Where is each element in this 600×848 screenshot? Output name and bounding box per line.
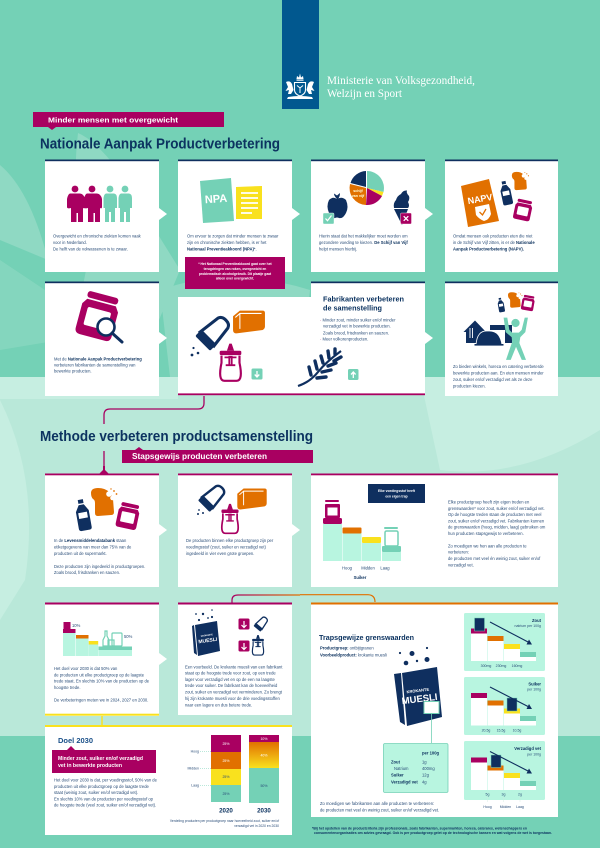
icon: document	[236, 186, 262, 219]
chart: stacked bars: 10%	[260, 737, 268, 741]
footnote	[312, 826, 552, 835]
callout	[52, 746, 156, 773]
icon: up arrow	[348, 369, 358, 380]
icon: NAPV book: NAPV	[467, 192, 493, 206]
list: · Meer volkorenproducten.	[320, 336, 368, 342]
icon: muesli box: KROKANTE	[406, 687, 430, 694]
chart: verzadigd vet: 3g	[502, 792, 505, 796]
chart: verzadigd vet: 5g	[486, 792, 489, 796]
chart: stacked bars: Laag	[191, 784, 199, 788]
chart: stacked bars: 25%	[222, 792, 230, 796]
card: voedingsstoffen	[178, 474, 300, 587]
icon: ice cream	[394, 190, 412, 225]
list: · Minder zout, minder suiker en/of minder	[320, 318, 396, 322]
footnote: *Bij het opstellen van de productcriteria zijn professionals, zoals fabrikanten, supermarkten, horeca, caterares, wetenschappers en	[312, 826, 527, 830]
chart: suiker: 10,5g	[513, 728, 521, 732]
card: schijf van vijf	[311, 160, 433, 272]
list	[320, 318, 396, 342]
ministry ribbon	[282, 0, 319, 109]
chart: mini steps	[63, 622, 133, 656]
text	[54, 356, 142, 374]
nutrition table	[384, 744, 448, 792]
text: voedingsstof (zout, suiker en verzadigd vet)	[186, 544, 266, 550]
chart: stacked bars: 25%	[222, 775, 230, 779]
text: Elke productgroep heeft zijn eigen treden en	[448, 500, 530, 504]
heading: de samenstelling	[323, 304, 382, 312]
text	[448, 500, 546, 567]
product info: Voorbeeldproduct: krokante muesli	[320, 652, 387, 658]
note: preventieakkoord: * Het Nationaal Preventieakkoord gaat over het	[198, 262, 273, 266]
caption: Verdeling producten per productgroep naar hoeveelheid zout, suiker en/of	[170, 819, 279, 823]
icon: muesli box	[192, 609, 220, 656]
card: fabrikanten	[178, 282, 433, 395]
icon: bread	[512, 172, 529, 190]
icon: wheat	[298, 349, 341, 386]
text: Omdat mensen ook producten eten die niet	[453, 234, 533, 238]
text	[187, 234, 279, 251]
chart: sugar steps: Midden	[361, 566, 375, 570]
nutrition table: Zout	[391, 760, 401, 764]
text: bewerkte producten aan. En eten mensen minder	[453, 370, 544, 376]
text	[319, 234, 408, 251]
chart: verzadigd vet: 2g	[518, 792, 522, 796]
chart: stacked bars: Midden	[188, 766, 199, 770]
chart: mini steps: 50%	[124, 634, 133, 639]
icon: pie: schijf	[353, 189, 363, 193]
text: Nationaal Preventieakkoord (NPA)*.	[187, 246, 257, 251]
text: Zo moedigen we hen aan alle producten te	[448, 544, 527, 548]
text	[453, 364, 544, 388]
icon: muesli box: MUESLI	[401, 692, 438, 707]
nutrition table: 4g	[422, 780, 427, 784]
text	[54, 538, 145, 575]
banner: stapsgewijs	[122, 447, 313, 463]
chart: zout	[464, 613, 545, 671]
chart: stacked bars: 25%	[222, 759, 230, 763]
chart: suiker: 20,5g	[482, 728, 490, 732]
heading: Trapsgewijze grenswaarden	[319, 633, 414, 642]
nutrition table: 12g	[422, 772, 430, 778]
text: hun producten stapsgewijs te verbeteren.	[448, 531, 524, 536]
text: verbeteren fabrikanten de samenstelling van	[54, 362, 136, 368]
icon: sugar reduce	[238, 635, 264, 655]
icon: syrup	[220, 344, 241, 381]
text: producten kiezen.	[453, 383, 486, 388]
icon: muesli box: KROKANTE	[201, 633, 214, 638]
text: hij zijn krokante muesli voor de drie voedingsstoffen	[185, 696, 280, 701]
text: Het doel voor 2030 is dat 50% van	[54, 666, 118, 671]
text: De helft van de volwassenen is te zwaar.	[53, 246, 128, 251]
text: Op de hoogste treden staan de producten met veel	[448, 512, 542, 517]
text: verbeteren:	[448, 550, 469, 555]
text: staat (weinig zout, suiker en/of verzadigd vet).	[54, 790, 138, 795]
card: muesli voorbeeld	[178, 602, 292, 715]
chart: stacked bars: 40%	[260, 754, 268, 758]
chart: zout: Zout	[532, 618, 542, 623]
text: in de Schijf van Vijf zitten, is er de Nationale	[453, 240, 535, 245]
card: doel 2030	[45, 725, 292, 835]
text: trede voor suiker. De fabrikant kan de hoeveelheid	[185, 683, 278, 688]
nutrition table: per 100g	[422, 750, 440, 756]
text: grenswaarden* voor zout, suiker en/of verzadigd vet.	[448, 506, 545, 511]
text: zout, suiker en/of verzadigd vet als ze deze	[453, 377, 533, 382]
nutrition table: 400mg	[422, 766, 435, 771]
text: naar een lagere en dus betere trede.	[185, 702, 252, 708]
callout: Minder zout, suiker en/of verzadigd	[58, 756, 143, 762]
icon: apple	[323, 193, 348, 224]
chart: zout: 300mg	[481, 664, 491, 668]
text: Aanpak Productverbetering (NAPV).	[453, 246, 524, 251]
title: methode: Methode verbeteren productsamenstelling	[40, 429, 313, 445]
icon: pie: van vijf	[352, 194, 365, 198]
chart: stacked bars	[188, 735, 279, 814]
nutrition table: Suiker	[391, 772, 404, 778]
chart: sugar steps: Laag	[380, 566, 390, 570]
ministry name: Ministerie van Volksgezondheid,	[327, 74, 475, 87]
text: En slechts 10% van de producten per voedingsstof op	[54, 796, 154, 802]
banner: stapsgewijs: Stapsgewijs producten verbeteren	[132, 452, 267, 461]
chart: mini steps: 10%	[72, 623, 81, 628]
chart: stacked bars: 2030	[257, 808, 271, 814]
icon: person	[504, 318, 528, 360]
text: ingedeeld in vier even grote groepen.	[186, 551, 254, 556]
text: Zo bieden winkels, horeca en catering verbeterde	[453, 364, 544, 369]
text: hoogste trede.	[54, 685, 80, 690]
icon: muesli box: MUESLI	[198, 637, 218, 645]
product info: Productgroep: ontbijtgranen	[320, 646, 374, 650]
heading: Doel 2030	[58, 736, 93, 745]
icon: down arrow	[252, 368, 262, 380]
text: Het doel voor 2030 is dat, per voedingsstof, 50% van de	[54, 778, 158, 782]
text: gezondere voeding te kiezen. De Schijf van Vijf	[319, 240, 408, 245]
chart: stacked bars: Hoog	[191, 750, 199, 754]
chart: sugar steps: Hoog	[342, 566, 353, 570]
caption: verzadigd vet in 2020 en 2030	[234, 824, 279, 828]
icon: butter	[233, 311, 265, 333]
card: NPA	[178, 160, 300, 272]
chart: stacked bars: 2020	[219, 808, 233, 814]
text: de hoogste trede (veel zout, suiker en/of verzadigd vet).	[54, 802, 156, 808]
chart: verzadigd vet	[464, 741, 545, 809]
chart: verzadigd vet: per 100g	[527, 752, 541, 756]
connector yellow	[101, 716, 103, 725]
icon: people	[67, 186, 132, 222]
icon: foods	[74, 488, 141, 531]
chart: suiker: Suiker	[528, 682, 541, 686]
callout: Elke voedingsstof heeft	[378, 489, 416, 493]
text	[453, 234, 535, 251]
list: Zoals brood, frisdranken en sauzen.	[323, 330, 389, 335]
icon: foods	[497, 292, 535, 313]
text: Hierin staat dat het makkelijker moet worden om	[319, 234, 408, 238]
nutrition table: Natrium	[394, 766, 409, 771]
callout: vet in bewerkte producten	[58, 763, 122, 769]
chart: verzadigd vet: Hoog	[483, 805, 492, 809]
icon: muesli box	[394, 647, 442, 743]
text	[54, 666, 150, 702]
icon: salt shaker	[191, 313, 233, 356]
card: winkels horeca	[445, 282, 558, 396]
icon: jar and magnifier	[74, 290, 122, 342]
connector 1	[104, 396, 204, 468]
text	[186, 538, 274, 556]
text: etiketgegevens van meer dan 75% van de	[54, 544, 132, 550]
icon: jar	[513, 198, 533, 222]
product info	[320, 646, 387, 658]
chart: suiker: 15,5g	[497, 728, 505, 732]
callout	[368, 484, 425, 503]
text: trede staat. En slechts 10% van de producten op de	[54, 679, 150, 684]
chart: sugar steps: Suiker	[354, 575, 367, 580]
text: helpt mensen hierbij.	[319, 246, 357, 251]
text: de producten uit elke productgroep op de laagste	[54, 672, 145, 678]
footnote: consumentenorganisaties om advies gevraagd. Ook is per productgroep gelet op de technologische kansen en wat volgens de wet is toegestaan.	[314, 831, 552, 835]
text: Zo moedigen we fabrikanten aan alle producten te verbeteren:	[320, 801, 434, 806]
text: lager voor verzadigd vet en op de een na laagste	[185, 677, 275, 682]
chart: zout: natrium per 100g	[515, 624, 541, 628]
text: Overgewicht en chronische ziekten komen vaak	[53, 234, 142, 238]
text: zijn en chronische ziekten hebben, is er het	[187, 240, 267, 245]
note: preventieakkoord: alleen over overgewicht.	[216, 276, 254, 280]
text: De verbeteringen meten we in 2024, 2027 en 2030.	[54, 698, 148, 702]
title: Nationale Aanpak Productverbetering	[40, 136, 280, 152]
ministry name	[327, 74, 475, 100]
text: Om ervoor te zorgen dat minder mensen te zwaar	[187, 234, 279, 238]
chart: suiker	[464, 677, 545, 735]
icon: NPA book: NPA	[205, 193, 228, 206]
icon: bottle	[499, 180, 513, 206]
text: Met de Nationale Aanpak Productverbetering	[54, 356, 142, 362]
logo emblem	[286, 74, 314, 99]
list: verzadigd vet in bewerkte producten.	[323, 324, 391, 329]
note: preventieakkoord: problematisch alcoholgebruik. Dit plaatje gaat	[199, 272, 272, 276]
text: producten uit elke productgroep op de laagste trede	[54, 784, 150, 789]
chart: verzadigd vet: Verzadigd vet	[514, 746, 542, 751]
text: de producten met veel én weinig zout, suiker en/of	[448, 556, 541, 561]
nutrition table: 1g	[422, 760, 427, 764]
chart: verzadigd vet: Midden	[500, 805, 511, 809]
text	[320, 801, 439, 812]
text	[54, 778, 158, 808]
text: zout, suiker en verzadigd vet verminderen. Zo brengt	[185, 690, 283, 694]
chart: sugar steps	[323, 500, 401, 580]
text: In de Levensmiddelendatabank staan	[54, 538, 127, 543]
nutrition table: Verzadigd vet	[391, 780, 418, 784]
text: Deze producten zijn ingedeeld in productgroepen.	[54, 564, 145, 569]
icon: house and cloche	[464, 320, 512, 346]
heading: Fabrikanten verbeteren	[323, 294, 404, 304]
chart: zout: 230mg	[496, 664, 506, 668]
text: staat op de hoogste trede voor zout, op een trede	[185, 671, 276, 676]
text: zout, suiker en/of verzadigd vet. Fabrikanten kunnen	[448, 518, 545, 524]
text: bewerkte producten.	[54, 369, 92, 374]
heading	[323, 294, 404, 312]
card: doel steps	[45, 602, 167, 716]
chart: verzadigd vet: Laag	[516, 805, 524, 809]
text: De producten binnen elke productgroep zijn per	[186, 538, 274, 543]
text: verzadigd vet.	[448, 562, 474, 567]
text: voor in Nederland.	[53, 240, 87, 245]
text: Een voorbeeld. De krokante muesli van een fabrikant	[185, 664, 283, 670]
chart: stacked bars: 25%	[222, 742, 230, 746]
connector 2	[232, 595, 375, 603]
card: levensmiddelen	[45, 474, 167, 587]
card: overgewicht	[45, 160, 167, 272]
ministry name: Welzijn en Sport	[327, 87, 403, 100]
icon: salt reduce	[238, 615, 269, 632]
card: eigen trap	[311, 474, 558, 587]
text: de producten met veel én weinig zout, suiker en/of verzadigd vet.	[320, 808, 439, 812]
note: preventieakkoord	[185, 257, 285, 289]
text: de grenswaarden (hoog, midden, laag) gebruiken om	[448, 524, 546, 530]
text: Zoals brood, frisdranken en sauzen.	[54, 570, 120, 575]
icon: pie	[350, 171, 384, 205]
card: NAPV	[445, 160, 558, 272]
note: preventieakkoord: terugdringen van roken, overgewicht en	[204, 267, 266, 271]
chart: zout: 160mg	[512, 664, 522, 668]
text: producten uit de supermarkt.	[54, 551, 107, 556]
banner: minder mensen: Minder mensen met overgewicht	[48, 116, 179, 125]
chart: suiker: per 100g	[527, 688, 541, 692]
icon: foods	[197, 482, 267, 533]
callout: een eigen trap	[385, 494, 408, 498]
text	[185, 664, 283, 708]
text	[53, 234, 142, 251]
caption	[170, 819, 279, 828]
card: jar magnifier	[45, 282, 167, 396]
panel: trapsgewijze grenswaarden	[311, 602, 558, 817]
chart: stacked bars: 50%	[260, 784, 268, 788]
connector tip	[99, 466, 109, 474]
banner: minder mensen	[33, 112, 224, 130]
